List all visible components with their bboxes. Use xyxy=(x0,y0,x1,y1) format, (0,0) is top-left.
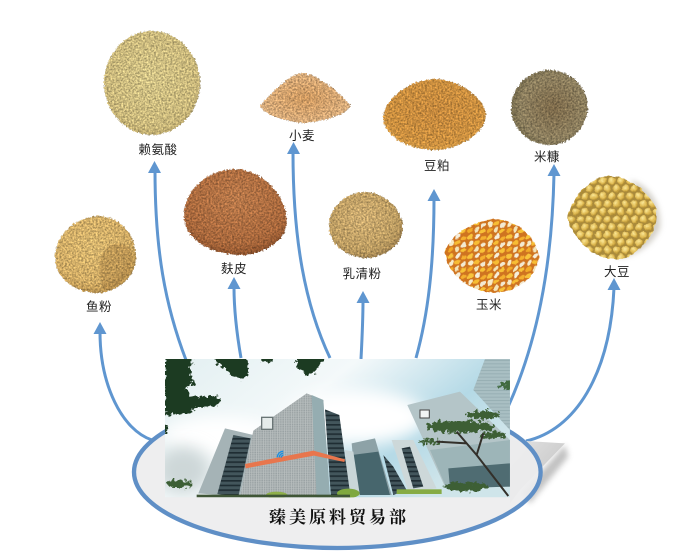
icon: lysine pile xyxy=(104,31,200,135)
title: 臻美原料贸易部 xyxy=(269,507,409,527)
arrow: to soybean meal xyxy=(416,189,440,358)
photo: office buildings xyxy=(157,355,512,498)
arrow: to bran xyxy=(228,277,241,358)
ellipse platform xyxy=(134,396,541,548)
label: corn: 玉米 xyxy=(476,298,502,312)
base plate: department platform xyxy=(134,396,568,548)
icon: corn pile xyxy=(445,219,539,293)
icon: rice bran pile xyxy=(511,70,588,145)
arrow: to rice bran xyxy=(508,164,560,407)
icon: whey powder pile xyxy=(329,192,403,258)
icon: wheat pile xyxy=(260,73,351,123)
icon: bran pile xyxy=(184,169,287,255)
label: soybean meal: 豆粕 xyxy=(424,158,450,173)
label: soybean: 大豆 xyxy=(604,265,630,279)
label: rice bran: 米糠 xyxy=(534,149,560,164)
arrow: to whey powder xyxy=(356,291,370,359)
arrow: to wheat xyxy=(287,142,330,358)
arrow: to fish meal xyxy=(94,322,152,440)
page fold shadow xyxy=(510,440,568,503)
label: wheat: 小麦 xyxy=(289,129,315,143)
label: whey powder: 乳清粉 xyxy=(342,266,382,281)
label: fish meal: 鱼粉 xyxy=(86,299,112,314)
icon: fish meal pile xyxy=(55,216,136,293)
arrow: to lysine xyxy=(148,161,186,360)
icon: soybean meal pile xyxy=(383,79,486,150)
label: bran: 麸皮 xyxy=(221,262,247,276)
icon: soybean pile xyxy=(568,176,660,259)
label: lysine: 赖氨酸 xyxy=(138,142,178,157)
arrow: to soybean xyxy=(526,278,620,441)
